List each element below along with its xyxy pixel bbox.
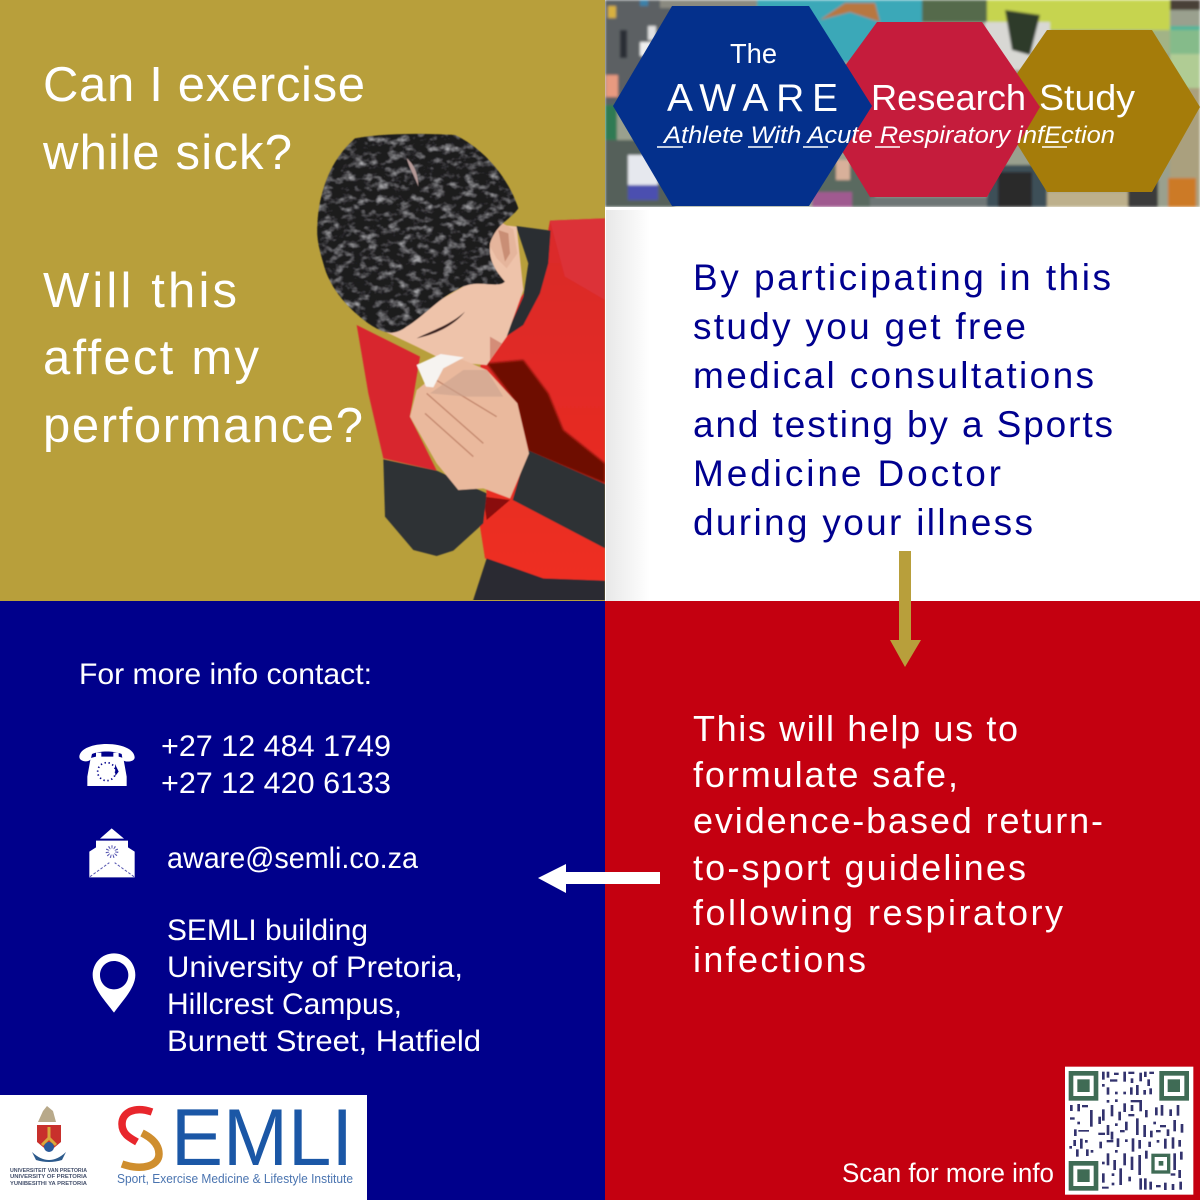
panel: white benefits panel — [606, 207, 1200, 601]
banner title: The — [730, 38, 777, 69]
panel: study header banner — [605, 0, 1200, 207]
text: address: University of Pretoria, — [167, 951, 463, 984]
heading: exercise and performance questions: while sick? — [42, 126, 292, 180]
heading: exercise and performance questions — [42, 58, 365, 453]
banner title: Research — [871, 77, 1026, 118]
text: study benefits: Medicine Doctor — [693, 453, 1001, 494]
heading: contact: For more info contact: — [79, 658, 372, 691]
heading: exercise and performance questions: performance? — [43, 399, 363, 453]
heading: exercise and performance questions: affect my — [43, 331, 260, 385]
text: study benefits: and testing by a Sports — [693, 404, 1113, 445]
text: study outcomes — [693, 708, 1103, 980]
text: study outcomes: infections — [693, 939, 866, 980]
icon: map pin — [93, 953, 135, 1013]
text: phone numbers: +27 12 420 6133 — [161, 767, 391, 800]
hexagon: gold — [1017, 30, 1200, 192]
QR code — [1065, 1067, 1193, 1195]
icon: envelope — [89, 828, 135, 877]
logo: University of Pretoria crest: YUNIBESITHI YA PRETORIA — [10, 1181, 87, 1187]
arrow: white left arrow — [538, 864, 660, 893]
hexagon: blue — [613, 6, 872, 206]
text: study outcomes: formulate safe, — [693, 754, 958, 795]
text: study benefits: during your illness — [693, 502, 1033, 543]
arrow: gold down arrow — [890, 551, 921, 667]
text: address: SEMLI building — [167, 914, 368, 947]
heading: exercise and performance questions: Can I exercise — [43, 58, 365, 112]
hexagon: red — [842, 22, 1040, 197]
logo: SEMLI: EMLI — [171, 1093, 353, 1183]
logo: University of Pretoria crest: UNIVERSITEIT VAN PRETORIA — [10, 1168, 87, 1174]
text: study outcomes: evidence-based return- — [693, 800, 1103, 841]
text: address: Hillcrest Campus, — [167, 988, 402, 1021]
text: address — [167, 914, 481, 1058]
text: address: Burnett Street, Hatfield — [167, 1025, 481, 1058]
banner title: AWARE — [667, 77, 838, 120]
logo: SEMLI: Sport, Exercise Medicine & Lifestyle Institute — [117, 1172, 353, 1186]
photo: athlete blowing his nose — [317, 134, 605, 602]
text: study benefits: By participating in this — [693, 257, 1111, 298]
banner title: Athlete With Acute Respiratory infEction — [662, 122, 1115, 149]
logo: University of Pretoria crest — [10, 1106, 87, 1187]
heading: exercise and performance questions: Will this — [43, 264, 237, 318]
banner title — [657, 38, 1135, 149]
text: study benefits — [693, 257, 1113, 543]
text: study outcomes: to-sport guidelines — [693, 847, 1026, 888]
logo: University of Pretoria crest: UNIVERSITY OF PRETORIA — [10, 1174, 87, 1180]
banner title: Study — [1039, 77, 1135, 118]
panel: navy contact panel — [0, 601, 605, 1200]
text: study benefits: study you get free — [693, 306, 1026, 347]
text: study benefits: medical consultations — [693, 355, 1094, 396]
text: phone numbers: +27 12 484 1749 — [161, 730, 391, 763]
logo strip — [0, 1093, 367, 1200]
text: email: aware@semli.co.za — [167, 842, 418, 875]
icon: telephone — [79, 744, 135, 786]
panel: gold question panel — [0, 0, 605, 601]
text: phone numbers — [161, 730, 391, 800]
photo collage background — [605, 0, 1200, 207]
text: scan prompt: Scan for more info — [842, 1158, 1054, 1188]
panel: red outcomes panel — [605, 601, 1200, 1200]
text: study outcomes: This will help us to — [693, 708, 1018, 749]
text: study outcomes: following respiratory — [693, 892, 1063, 933]
